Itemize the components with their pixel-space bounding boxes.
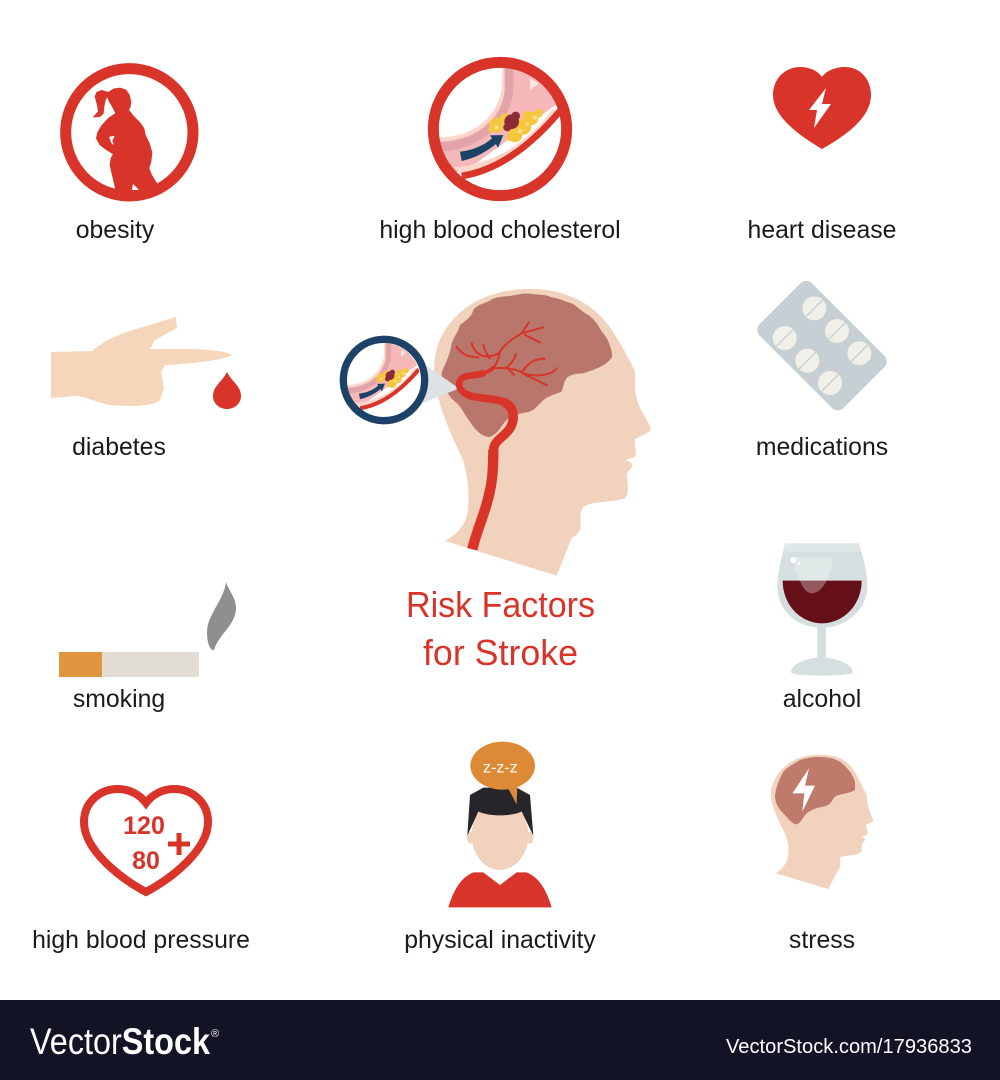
registered mark: ®	[211, 1028, 219, 1040]
label: stress: stress	[789, 927, 855, 954]
icon: stress head	[771, 755, 873, 889]
head silhouette	[434, 289, 651, 576]
inset magnifier: plaque in artery	[343, 339, 425, 421]
speech bubble: z-z-z	[483, 759, 518, 776]
icon: blood drop	[213, 372, 241, 409]
icon: physical inactivity person	[448, 742, 552, 907]
hair	[467, 788, 533, 836]
label: physical inactivity: physical inactivity	[404, 927, 596, 954]
brain	[442, 293, 612, 437]
label: alcohol: alcohol	[783, 686, 861, 713]
icon: heart disease	[773, 67, 871, 149]
label: medications: medications	[756, 434, 888, 461]
title	[406, 584, 595, 673]
footer logo: VectorStock	[30, 1021, 210, 1062]
magnifier cone	[421, 366, 459, 404]
footer image id: VectorStock.com/17936833	[726, 1036, 972, 1058]
label: heart disease: heart disease	[748, 217, 896, 244]
icon: high blood cholesterol	[433, 62, 567, 196]
label: high blood cholesterol: high blood cholesterol	[379, 217, 621, 244]
icon: blood pressure heart: 80	[132, 847, 160, 875]
icon: medications blister pack	[754, 278, 890, 414]
icon: obesity	[66, 69, 193, 197]
label: smoking: smoking	[73, 686, 165, 713]
icon: blood pressure heart: 120	[123, 812, 165, 840]
shirt	[448, 872, 552, 907]
icon: blood pressure heart	[84, 789, 208, 892]
central illustration: head with brain and artery	[343, 289, 651, 576]
label: obesity: obesity	[76, 217, 155, 244]
label: high blood pressure: high blood pressure	[32, 927, 250, 954]
speech bubble	[470, 742, 535, 804]
label: diabetes: diabetes	[72, 434, 166, 461]
title: for Stroke	[423, 632, 578, 673]
title: Risk Factors	[406, 584, 595, 625]
icon: cigarette	[59, 582, 236, 677]
icon: smoke	[207, 582, 236, 650]
main carotid artery	[457, 322, 557, 549]
footer bar	[0, 1000, 1000, 1080]
face	[467, 800, 534, 870]
icon: wine glass	[777, 543, 867, 676]
icon: diabetes hand	[51, 317, 241, 409]
